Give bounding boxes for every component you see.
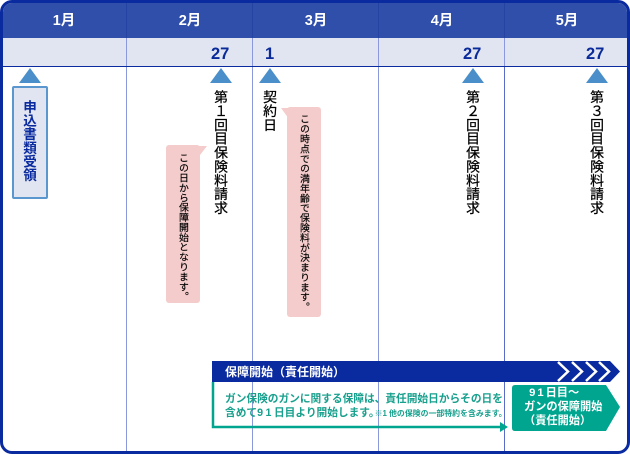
marker: April 27 <box>462 68 484 83</box>
marker: March 1 <box>259 68 281 83</box>
third premium request label: 第３回目保険料請求 <box>588 90 604 215</box>
callout: coverage start: この日から保障開始となります。 <box>177 153 188 301</box>
application receipt box <box>12 86 48 199</box>
coverage explanation text <box>225 392 507 419</box>
green bracket arrow <box>212 382 508 432</box>
second premium request label: 第２回目保険料請求 <box>464 90 480 215</box>
box label: 申込書類受領 <box>21 100 36 182</box>
banner title: 保障開始（責任開始） <box>225 365 345 379</box>
date: May 27: 27 <box>586 45 604 63</box>
tag text: （責任開始） <box>524 415 591 427</box>
month header: 4月: 4月 <box>431 13 453 29</box>
coverage explanation text: ガン保険のガンに関する保障は、責任開始日からその日を <box>225 393 503 405</box>
month header: 3月: 3月 <box>305 13 327 29</box>
callout: premium determined <box>281 107 321 317</box>
tag text <box>524 386 602 427</box>
contract date label: 契約日 <box>261 90 277 132</box>
marker: May 27 <box>586 68 608 83</box>
date: April 27: 27 <box>463 45 481 63</box>
marker: February 27 <box>210 68 232 83</box>
day 91 coverage start tag <box>512 385 620 431</box>
coverage start banner <box>212 361 620 382</box>
date: March 1: 1 <box>265 45 274 63</box>
marker: January <box>19 68 41 83</box>
month header: 2月: 2月 <box>179 13 201 29</box>
tag text: 91日目～ <box>529 387 579 399</box>
date: February 27: 27 <box>211 45 229 63</box>
callout: premium determined: この時点での満年齢で保険料が決まります。 <box>298 114 309 312</box>
month header: 1月: 1月 <box>53 13 75 29</box>
tag text: ガンの保障開始 <box>524 401 602 413</box>
coverage explanation text: 含めて91日目より開始します。※1 他の保険の一部特約を含みます。 <box>225 407 507 419</box>
first premium request label: 第１回目保険料請求 <box>212 90 228 215</box>
month header: 5月: 5月 <box>556 13 578 29</box>
callout: coverage start <box>166 145 207 303</box>
